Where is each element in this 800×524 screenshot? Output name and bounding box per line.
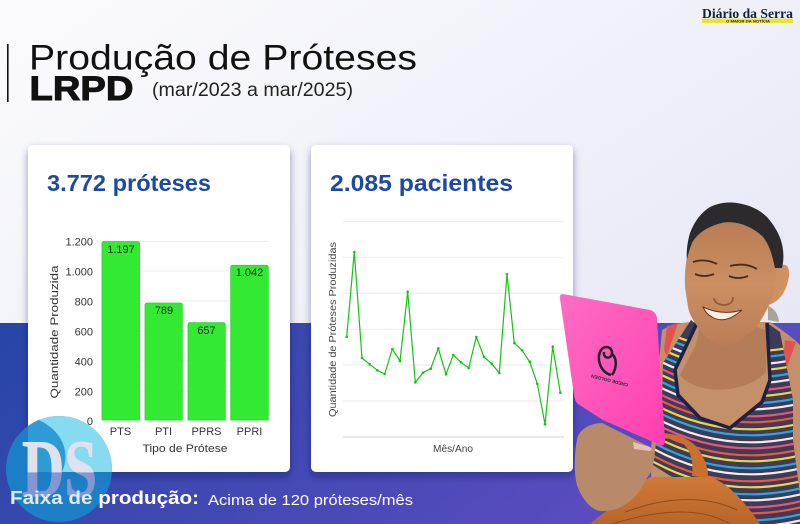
- footer text: Faixa de produção:: [10, 488, 199, 508]
- bar chart: Quantidade Produzida: [49, 264, 61, 398]
- grey hair at nape: [768, 306, 779, 322]
- mirror: [560, 294, 665, 445]
- bar chart: 0: [87, 416, 93, 428]
- watermark: DS logo: DS: [22, 423, 97, 514]
- neck shading: [680, 325, 766, 390]
- hand: [575, 423, 655, 511]
- hair: [687, 202, 783, 268]
- panel: line chart card: [311, 145, 573, 472]
- bar chart: PTS: [110, 426, 131, 438]
- title block: LRPD: [30, 70, 134, 108]
- bar chart: PTI: [155, 426, 172, 438]
- bar chart: 1.197: [107, 244, 135, 256]
- body and chest: [650, 322, 800, 524]
- logo: Diário da Serra: Diário da Serra: [702, 7, 793, 22]
- bar chart: 800: [75, 296, 93, 308]
- line chart: Quantidade de Próteses Produzidas: [328, 242, 339, 417]
- bar chart: 200: [75, 386, 93, 398]
- mirror logo: CREDE GOLDEN: [591, 373, 629, 387]
- mirror logo: [591, 347, 629, 387]
- bar chart: [49, 236, 268, 455]
- logo: Diário da Serra: O MAIOR DA NOTÍCIA: [726, 19, 770, 24]
- footer text: Acima de 120 próteses/mês: [208, 492, 413, 509]
- striped tank top: [653, 320, 800, 524]
- watermark: DS logo: [6, 416, 112, 522]
- heading: total de próteses: 3.772 próteses: [47, 170, 211, 196]
- title block: [7, 38, 417, 108]
- title block: Produção de Próteses: [29, 38, 417, 78]
- bar chart: 1.200: [65, 236, 93, 248]
- bar chart: Tipo de Prótese: [142, 443, 228, 455]
- face: [685, 222, 777, 345]
- panel: bar chart card: [28, 145, 290, 472]
- bar chart: 400: [75, 356, 93, 368]
- bar chart: 657: [197, 325, 216, 337]
- nose: [714, 297, 733, 305]
- bag handle: [660, 433, 708, 478]
- neckline trim: [675, 323, 770, 428]
- bar chart: 1.042: [236, 267, 263, 279]
- bar chart: PPRI: [237, 426, 262, 438]
- smile: [703, 307, 742, 320]
- thumb nail: [633, 442, 652, 451]
- bag: [590, 477, 760, 524]
- line chart: [328, 222, 564, 455]
- brows and eyes: [693, 260, 757, 278]
- title block: (mar/2023 a mar/2025): [152, 79, 353, 101]
- bar chart: 789: [155, 305, 173, 317]
- bar chart: PPRS: [192, 426, 221, 438]
- ear: [768, 265, 789, 305]
- red straps: [664, 323, 796, 370]
- photo: woman holding pink mirror: [560, 202, 800, 524]
- footer text: [10, 488, 413, 509]
- heading: total de pacientes: 2.085 pacientes: [330, 170, 513, 196]
- bar chart: 1.000: [65, 266, 93, 278]
- bar chart: 600: [75, 326, 93, 338]
- line chart: Mês/Ano: [433, 444, 473, 455]
